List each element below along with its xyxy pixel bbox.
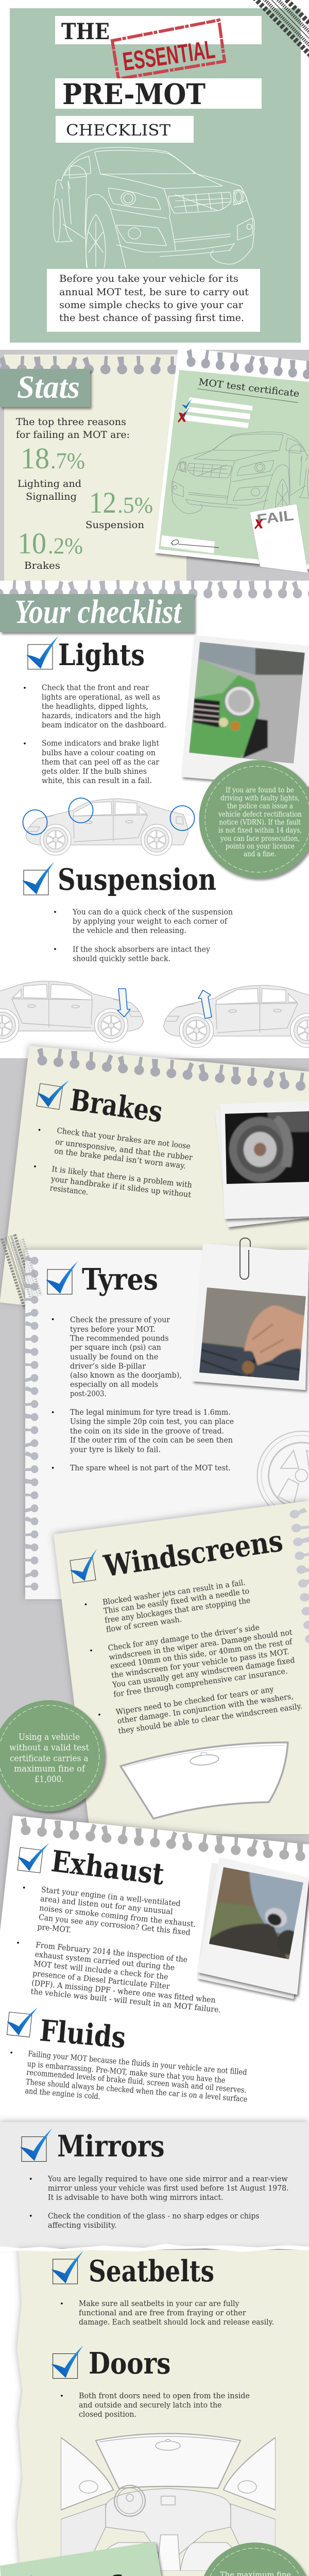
bullet text: other damage. In conjunction with the washers, [117, 1691, 294, 1726]
stat: 10.2% brakes: .2% [48, 533, 83, 558]
callout: faulty lights: If you are found to be [226, 786, 294, 794]
bullet text: they should be able to clear the windscreen easily. [117, 1701, 303, 1736]
bullet text: Doors [61, 2391, 250, 2419]
bullet text: or unresponsive, and that the rubber [55, 1137, 194, 1162]
bullet text: resistance. [49, 1183, 89, 1197]
icon: paperclip [240, 1238, 250, 1279]
bullet text: Check for any damage to the driver’s side [108, 1622, 260, 1653]
heading: Windscreens [101, 1523, 285, 1584]
stats intro text [16, 416, 130, 440]
stat: 12.5% suspension [85, 486, 153, 531]
stat: 18.7% lighting and signalling: Lighting and [18, 478, 81, 489]
callout: maximum fine £1,000 [0, 1700, 105, 1811]
title: PRE-MOT: PRE-MOT [62, 77, 205, 111]
illustration: car interior [61, 2434, 276, 2571]
panel: Brakes [0, 1046, 309, 1337]
heading: Suspension [58, 862, 216, 897]
bullet text: Check the condition of the glass - no sharp edges or chips [48, 2211, 260, 2221]
bullet text: (also known as the doorjamb), [70, 1370, 182, 1380]
notebook holes [0, 356, 177, 374]
bullet text: Check that your brakes are not loose [57, 1126, 191, 1151]
notebook holes [36, 1047, 309, 1096]
bullet text [52, 1315, 234, 1472]
tread mark [2, 1234, 37, 1309]
bullet text: Seatbelts [61, 2299, 274, 2327]
checkbox [3, 2574, 37, 2576]
photo: exhaust smoke [197, 1857, 309, 1999]
intro text: Before you take your vehicle for its [59, 273, 238, 284]
photo: brake disc [215, 1101, 309, 1227]
bullet text: Some indicators and brake light [42, 739, 159, 748]
bullet text: Fluids: These should always be checked when the car is on a level surface [25, 2077, 248, 2104]
heading: Mirrors [57, 2129, 165, 2164]
stats intro text: The top three reasons [16, 416, 126, 428]
bullet text: Doors: closed position. [79, 2410, 136, 2419]
callout: maximum fine £1,000: certificate carries a [10, 1754, 89, 1764]
bullet text: mirror unless your vehicle was first used before 1st August 1978. [48, 2183, 289, 2193]
panel: Seatbelts and Doors [0, 2244, 309, 2576]
certificate: MOT test certificate: FAIL [256, 507, 295, 528]
bullet text: flow of screen wash. [106, 1615, 182, 1634]
callout: maximum fine £1,000: without a valid test [9, 1742, 89, 1753]
bullet text: Check the pressure of your [70, 1315, 170, 1324]
notebook holes [19, 1816, 309, 1865]
bullet text: Exhaust [17, 1885, 221, 2014]
bullet text: free any blockages that are stopping the [104, 1596, 251, 1625]
stat: 18.7% lighting and signalling: 18 [21, 442, 49, 475]
bullet text: The recommended pounds [70, 1333, 169, 1343]
callout: maximum fine £1,000: Using a vehicle [19, 1732, 80, 1742]
bullet text: the headlights, dipped lights, [42, 702, 148, 711]
bullet text: them that can peel off as the car [42, 757, 160, 767]
stat: 12.5% suspension: Suspension [85, 519, 144, 531]
bullet text: Exhaust: (DPF). A missing DPF - where one was fitted when [31, 1978, 216, 2005]
bullet text: the windscreen for your vehicle to pass its MOT. [111, 1647, 289, 1680]
callout: maximum fine £1,000: maximum fine of [14, 1764, 86, 1774]
intro text: some simple checks to give your car [59, 299, 244, 311]
stat: 12.5% suspension: 12 [89, 486, 116, 519]
torn edge [0, 2244, 309, 2252]
bullet text: Fluids: Failing your MOT because the fluids in your vehicle are not filled [28, 2049, 247, 2077]
torn notebook edge [0, 580, 309, 599]
illustration: car with lights circled [23, 798, 195, 855]
bullet text: Exhaust: Start your engine (in a well-ventilated [41, 1885, 181, 1908]
illustration: wheel [258, 1431, 309, 1520]
bullet text: Fluids: recommended levels of brake fluid, screen wash and oil reserves. [26, 2067, 247, 2095]
bullet text [85, 1578, 303, 1736]
callout: faulty lights: driving with faulty lights, [220, 794, 300, 803]
checkbox: Doors [52, 2345, 83, 2378]
heading tab: Stats: Stats [17, 370, 80, 405]
bullet text: Seatbelts: damage. Each seatbelt should lock and release easily. [79, 2317, 274, 2327]
bullet text [24, 683, 166, 785]
panel: Tyres [2, 1234, 309, 1599]
bullet text: Blocked washer jets can result in a fail. [102, 1578, 246, 1607]
bullet text: Fluids [10, 2049, 248, 2104]
stats intro text: for failing an MOT are: [16, 429, 130, 440]
bullet text: Exhaust: Can you see any corrosion? Get this fixed [38, 1912, 191, 1937]
illustration: car settling back [164, 986, 309, 1047]
heading: Tyres [82, 1262, 158, 1297]
bullet text: your tyre is likely to fail. [70, 1445, 161, 1454]
certificate: MOT test certificate: MOT test certificate [198, 377, 300, 399]
panel: stats [0, 347, 309, 581]
illustration: car outline [53, 147, 254, 268]
stat: 10.2% brakes: 10 [18, 527, 46, 560]
checkbox [20, 2128, 52, 2161]
heading tab: Your checklist: Your checklist [14, 593, 182, 631]
bullet text: It is likely that there is a problem with [52, 1164, 193, 1190]
bullet text: on the brake pedal isn’t worn away. [54, 1146, 186, 1171]
checkbox: Exhaust [16, 1840, 49, 1873]
callout: faulty lights: the police can issue a [227, 802, 293, 810]
stat: 18.7% lighting and signalling [18, 442, 85, 502]
callout: faulty lights [199, 760, 309, 878]
stat: 18.7% lighting and signalling: .7% [50, 448, 85, 473]
stat: 12.5% suspension: .5% [117, 493, 153, 518]
bullet text: Exhaust: MOT test will include a check for the [33, 1959, 169, 1981]
checkbox [35, 1076, 69, 1110]
background band [0, 1058, 309, 2250]
bullet text: the coin on its side in the groove of tread. [70, 1426, 224, 1435]
heading tab: Stats [0, 369, 90, 407]
bullet text: Fluids: up is embarrassing. Pre-MOT, make sure that you have the [27, 2059, 226, 2085]
panel: Mirrors [0, 2122, 309, 2248]
heading: Brakes [68, 1082, 164, 1129]
tread over holes [12, 1239, 41, 1299]
checkbox [67, 1549, 101, 1583]
bullet text: Doors: and outside and securely latch into the [79, 2400, 222, 2410]
notebook holes [24, 1256, 38, 1590]
checkbox: Seatbelts [52, 2251, 83, 2284]
bullet text: post-2003. [70, 1389, 107, 1398]
bullet text: should quickly settle back. [73, 954, 170, 963]
certificate: MOT test certificate [154, 347, 309, 573]
heading: Fluids: Fluids [39, 2013, 127, 2055]
panel: Horns [0, 2541, 173, 2576]
bullet text: driver’s side B-pillar [70, 1361, 146, 1370]
bullet text: This can be easily fixed with a needle to [103, 1586, 250, 1616]
heading: Lights [58, 638, 145, 672]
bullet text: Seatbelts: functional and are free from fraying or other [79, 2308, 246, 2317]
bullet text: Doors: Both front doors need to open from the inside [79, 2391, 250, 2400]
section: Lights [23, 635, 309, 878]
photo: coin in tyre tread [192, 1243, 309, 1390]
title: CHECKLIST: CHECKLIST [66, 122, 170, 140]
bullet text: affecting visibility. [48, 2221, 117, 2230]
title: CHECKLIST [56, 116, 194, 143]
bullet text: usually be found on the [70, 1352, 158, 1361]
stamp: ESSENTIAL [112, 20, 225, 79]
panel: Windscreens [54, 1501, 309, 1834]
bullet text: Check that the front and rear [42, 683, 149, 692]
bullet text: You are legally required to have one side mirror and a rear-view [47, 2174, 288, 2183]
callout: maximum fine £1,000: £1,000. [35, 1774, 64, 1785]
panel: Exhaust and Fluids [0, 1816, 309, 2122]
checkbox [46, 1261, 78, 1294]
bullet text: for free through comprehensive car insurance. [113, 1666, 288, 1699]
bullet text: Exhaust: pre-MOT. [37, 1922, 72, 1935]
bullet text: Wipers need to be checked for tears or any [115, 1684, 274, 1717]
bullet text: Exhaust: presence of a Diesel Particulate Filter [32, 1969, 170, 1991]
callout: faulty lights: and a fine. [244, 850, 276, 858]
bullet text [30, 2174, 289, 2230]
panel: header [10, 0, 309, 343]
callout: defective tyre fine [199, 2543, 309, 2576]
heading: Exhaust: Exhaust [49, 1844, 166, 1892]
stat: 10.2% brakes: Brakes [24, 560, 60, 571]
bullet text: Exhaust: From February 2014 the inspection of the [36, 1940, 188, 1964]
bullet text: Exhaust: the vehicle was built - will result in an MOT failure. [30, 1987, 221, 2014]
checkbox [22, 862, 54, 895]
bullet text [34, 1126, 194, 1199]
icon: tyre tracks corner [254, 0, 309, 82]
checkbox: Fluids [6, 2004, 38, 2038]
bullet text: You can do a quick check of the suspension [72, 907, 233, 917]
photo: green car headlight [181, 635, 309, 787]
bullet text: The legal minimum for tyre tread is 1.6mm. [70, 1408, 231, 1417]
bullet text: The spare wheel is not part of the MOT test. [70, 1463, 231, 1472]
bullet text: gets older. If the bulb shines [42, 767, 147, 776]
callout: faulty lights: points on your licence [226, 842, 295, 851]
section: Suspension [0, 862, 309, 1047]
stat: 18.7% lighting and signalling: Signalling [26, 491, 77, 502]
bullet text: It is advisable to have both wing mirrors intact. [48, 2193, 224, 2202]
bullet text: the vehicle and then releasing. [73, 926, 186, 935]
title: THE: THE [61, 19, 110, 45]
bullet text: lights are operational, as well as [42, 692, 160, 702]
illustration: windscreen [121, 1742, 288, 1819]
bullet text: especially on all models [70, 1380, 158, 1389]
bullet text: bulbs have a colour coating on [42, 748, 156, 757]
bullet text: exceed 10mm on this side, or 40mm on the rest of [110, 1637, 294, 1671]
checkbox [26, 636, 58, 669]
bullet text: your handbrake if it slides up without [50, 1174, 192, 1199]
heading: Seatbelts: Seatbelts [89, 2254, 214, 2289]
bullet text: If the shock absorbers are intact they [73, 945, 210, 954]
bullet text: windscreen in the wiper area. Damage should not [108, 1628, 293, 1662]
bullet text: You can usually get any windscreen damage fixed [111, 1655, 296, 1689]
intro text: annual MOT test, be sure to carry out [59, 286, 249, 298]
bullet text: If the outer rim of the coin can be seen then [70, 1435, 233, 1445]
notebook holes [289, 1507, 309, 1644]
bullet text: per square inch (psi) can [70, 1343, 161, 1352]
bullet text: Exhaust: exhaust system carried out during the [35, 1950, 175, 1972]
bullet text [54, 907, 233, 963]
illustration: car pressed down [0, 981, 144, 1042]
bullet text: Exhaust: noises or smoke coming from the exhaust. [39, 1903, 196, 1929]
intro text: the best chance of passing first time. [59, 312, 244, 324]
bullet text: by applying your weight to each corner of [73, 917, 228, 926]
bullet text: hazards, indicators and the high [42, 711, 161, 720]
bullet text: Using the simple 20p coin test, you can place [70, 1417, 234, 1426]
bullet text: white, this can result in a fail. [42, 776, 152, 785]
bullet text: beam indicator on the dashboard. [42, 720, 166, 730]
bullet text: Fluids: and the engine is cold. [25, 2086, 100, 2101]
callout: faulty lights: you can face prosecution, [220, 835, 300, 843]
bullet text: Exhaust: area) and listen out for any unusual [40, 1894, 174, 1917]
stamp: ESSENTIAL: ESSENTIAL [121, 35, 217, 76]
title: THE [55, 16, 262, 45]
heading: Doors: Doors [89, 2346, 170, 2381]
bullet text: Seatbelts: Make sure all seatbelts in your car are fully [79, 2299, 239, 2308]
intro text [47, 269, 260, 332]
stat: 10.2% brakes [18, 527, 83, 571]
bullet text: tyres before your MOT. [70, 1325, 156, 1334]
